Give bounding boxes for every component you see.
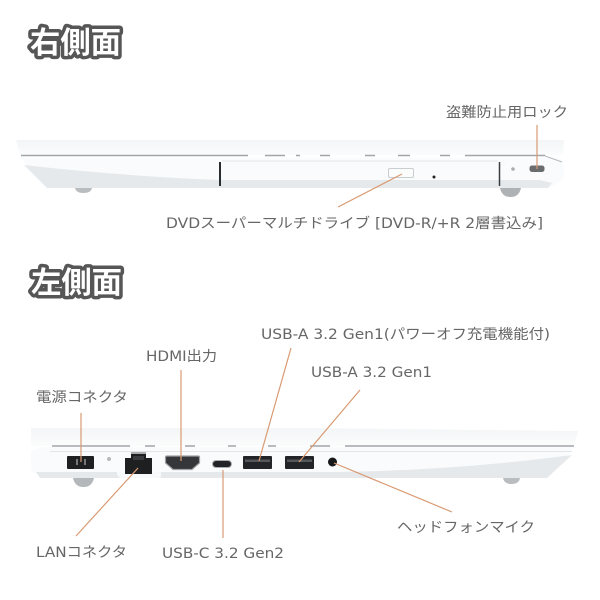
foot left — [73, 478, 94, 487]
lan port — [125, 452, 152, 474]
laptop: right side view — [16, 140, 564, 197]
label: usb-a power off charge: USB-A 3.2 Gen1(パワーオフ充電機能付) — [261, 327, 550, 343]
leader: usb-a 1 — [259, 348, 291, 461]
label: usb-c: USB-C 3.2 Gen2 — [162, 546, 284, 562]
foot left — [75, 188, 92, 193]
laptop: left side view — [31, 428, 578, 487]
label: usb-a: USB-A 3.2 Gen1 — [311, 365, 432, 381]
security lock slot — [530, 166, 544, 172]
power port — [67, 456, 94, 469]
drive eject button — [388, 168, 414, 178]
usb-a port 2 — [285, 456, 314, 469]
hdmi port — [166, 456, 200, 470]
foot right — [503, 478, 520, 484]
lan port surround — [117, 472, 161, 478]
leader: lock — [536, 125, 538, 169]
headphone jack — [328, 458, 337, 466]
leader: usb-a 2 — [299, 390, 360, 462]
leader: power — [80, 413, 82, 462]
drive tray line right — [498, 162, 500, 186]
usb-a port 1 — [243, 456, 272, 469]
usb-c port — [212, 460, 232, 468]
lid — [31, 428, 578, 446]
leader: headphone — [334, 463, 452, 512]
power indicator — [107, 457, 111, 461]
leader: hdmi — [180, 370, 182, 461]
title: right side: 右側面 — [30, 27, 121, 60]
body — [31, 447, 572, 478]
indicator — [511, 167, 515, 171]
label: lan: LANコネクタ — [36, 545, 127, 561]
label: power connector: 電源コネクタ — [36, 390, 128, 406]
emergency eject hole — [432, 176, 436, 178]
label: dvd drive: DVDスーパーマルチドライブ [DVD-R/+R 2層書込み] — [166, 215, 543, 232]
leader: lan — [76, 468, 138, 536]
drive tray line left — [219, 162, 221, 186]
lid — [16, 140, 564, 155]
label: security lock: 盗難防止用ロック — [446, 105, 568, 121]
leader: usb-c — [222, 470, 224, 538]
leader: dvd — [338, 174, 402, 207]
title: left side: 左側面 — [31, 267, 122, 300]
body — [21, 158, 564, 188]
label: headphone mic: ヘッドフォンマイク — [397, 520, 535, 536]
label: hdmi: HDMI出力 — [146, 349, 217, 365]
foot right — [500, 188, 521, 197]
